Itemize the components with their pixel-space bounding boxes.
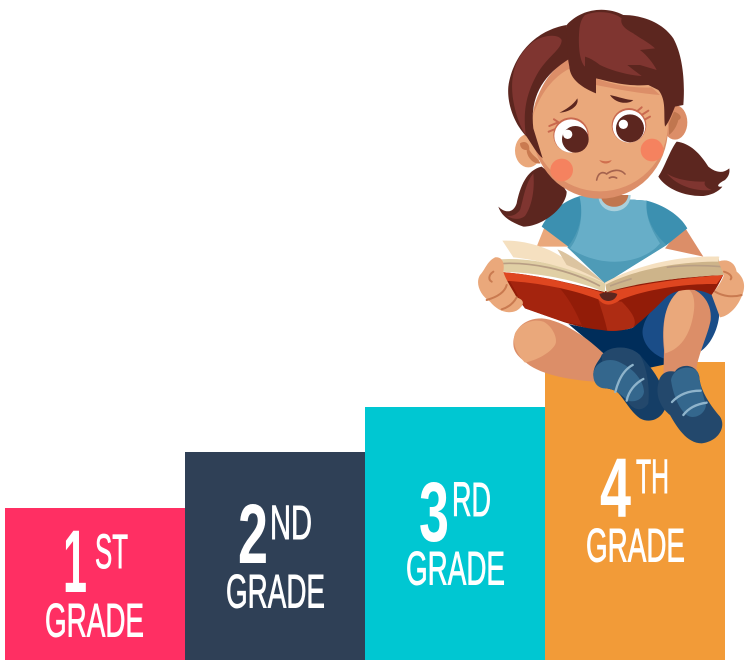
book pages (493, 241, 724, 292)
label: grade: GRADE (406, 542, 505, 594)
label: grade: GRADE (45, 594, 144, 646)
face (532, 55, 668, 199)
girl's head (498, 10, 729, 227)
label: 4th (600, 441, 669, 535)
label: 4th: TH (636, 451, 669, 504)
arms (537, 223, 703, 257)
hair (508, 10, 684, 158)
label: grade: GRADE (586, 518, 685, 572)
shirt (542, 195, 687, 283)
left eye (549, 117, 589, 153)
panel: 4th grade step (545, 362, 725, 660)
right hand (712, 260, 744, 317)
book cover (493, 272, 723, 331)
label: 3rd: RD (452, 474, 491, 527)
panel: 2nd grade step (185, 452, 365, 660)
ears (515, 105, 687, 167)
label: 2nd (238, 487, 312, 581)
right shoe (657, 366, 722, 443)
crossed leg (513, 318, 603, 382)
label: 1st: ST (95, 526, 128, 579)
illustration: girl reading a book (478, 10, 744, 443)
label: 2nd: ND (270, 497, 312, 550)
right pigtail (658, 142, 729, 196)
mouth (597, 170, 625, 180)
cheeks (550, 139, 663, 181)
label: 3rd: 3 (419, 465, 449, 559)
right eye (612, 107, 650, 143)
raised leg (663, 288, 711, 380)
nose (599, 160, 612, 163)
left pigtail (498, 167, 567, 227)
label: grade: GRADE (226, 564, 325, 618)
label: 4th: 4 (600, 441, 631, 535)
panel: 1st grade step (5, 508, 185, 660)
eyebrows (559, 95, 633, 113)
girl's body, book and legs (478, 195, 744, 443)
panel: 3rd grade step (365, 407, 545, 660)
label: 3rd (419, 465, 491, 559)
left shoe (593, 347, 667, 421)
left hand (478, 257, 523, 312)
label: 2nd: 2 (238, 487, 268, 581)
label: 1st: 1 (63, 511, 87, 611)
shorts (568, 286, 719, 368)
